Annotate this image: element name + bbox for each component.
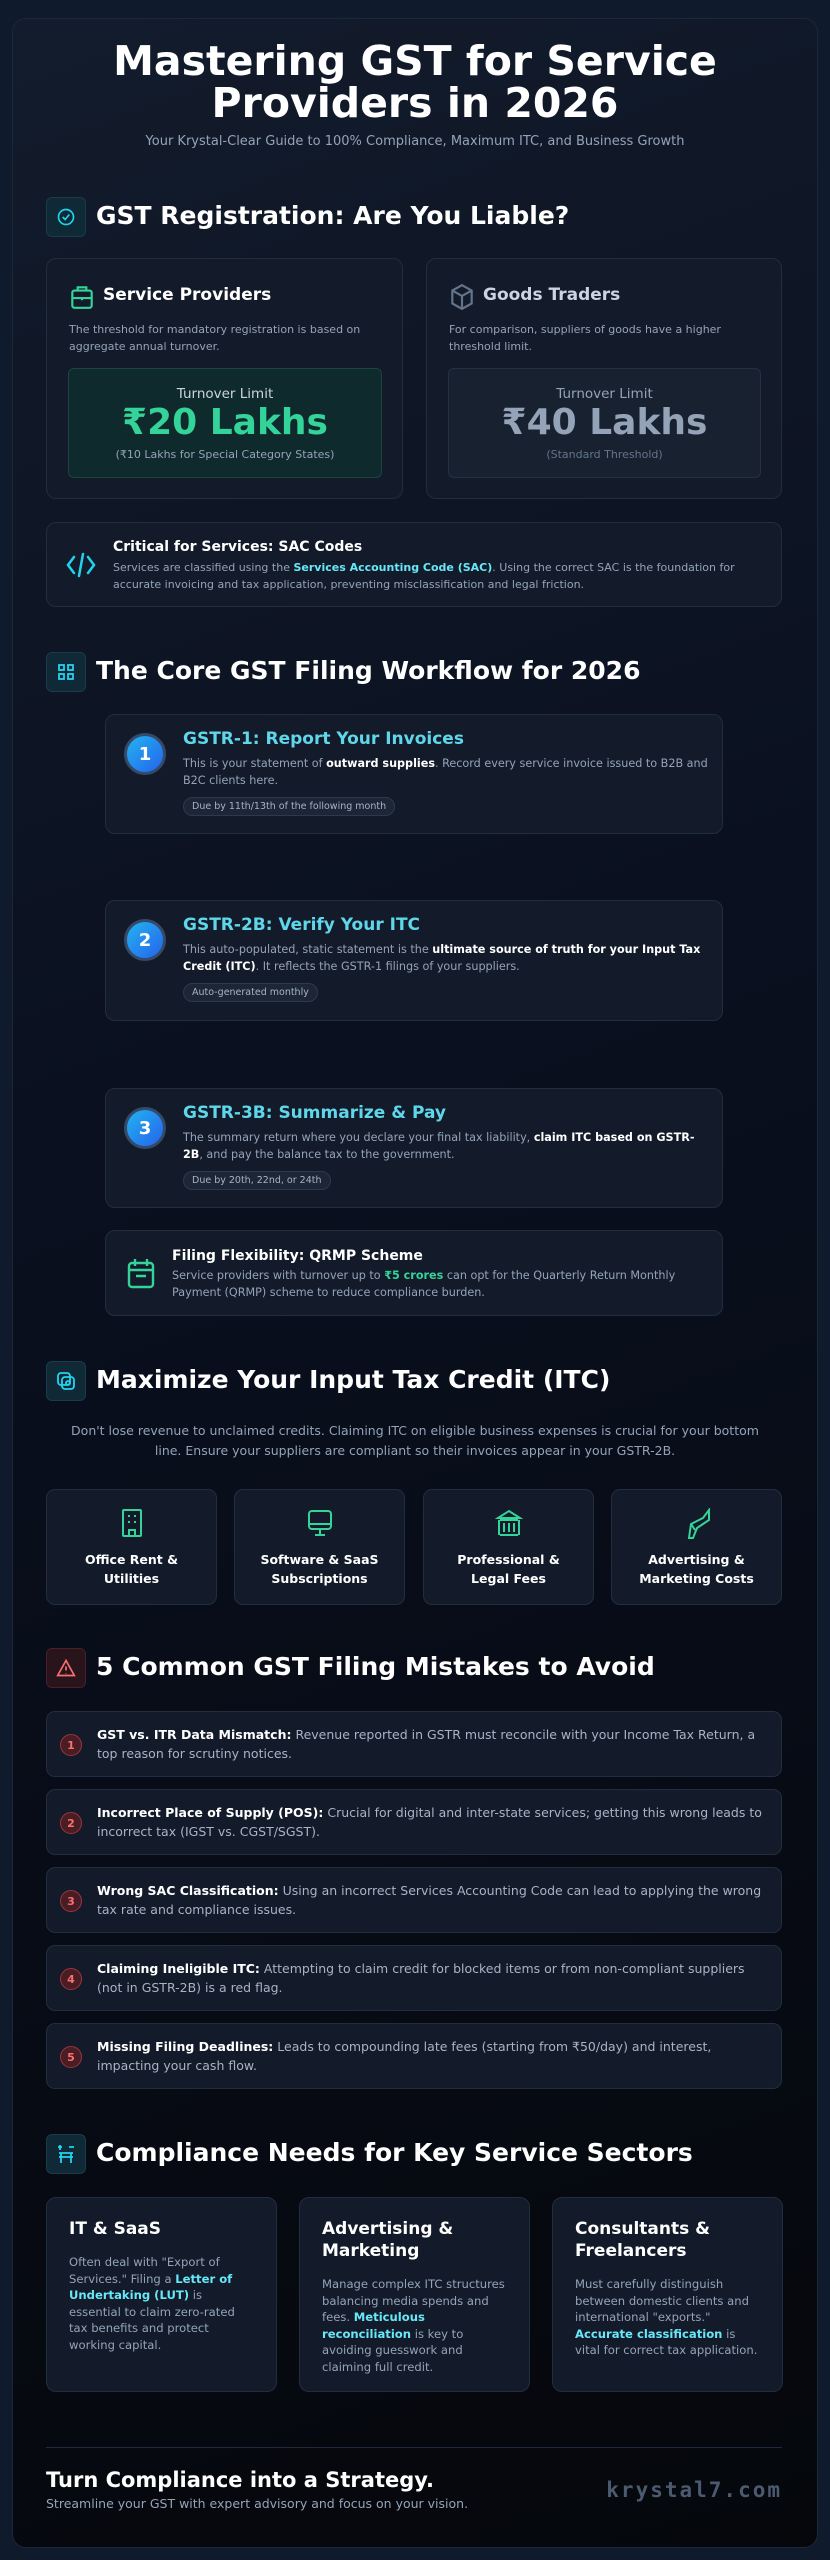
heading: sectors: Compliance Needs for Key Service Sectors [96,2138,693,2167]
mistake 3: 3 [67,1894,75,1908]
mistake 4: Claiming Ineligible ITC: Attempting to claim credit for blocked items or from non-compliant suppliers (not in GSTR-2B) is a red flag. [97,1961,745,1995]
ITC card: advertising [611,1489,782,1605]
limit box: ₹20 Lakhs [122,402,328,443]
sector: IT & SaaS: Often deal with "Export of Services." Filing a Letter of Undertaking (LUT) is essential to claim zero-rated tax benefits and protect working capital. [69,2255,235,2352]
step 2: This auto-populated, static statement is the ultimate source of truth for your Input Tax Credit (ITC). It reflects the GSTR-1 filings of your suppliers. [183,943,700,973]
icon: warning [46,1648,86,1688]
step 1: GSTR-1: Report Your Invoices [183,729,464,749]
limit box: Turnover Limit [177,386,273,402]
step 1 [105,714,723,834]
callout: SAC codes [46,522,782,607]
ITC card: professional: Legal Fees [471,1571,546,1586]
mistake 2 [46,1789,782,1855]
step 1: 1 [139,744,151,764]
heading: workflow: The Core GST Filing Workflow for 2026 [96,656,640,685]
mistake 5: 5 [67,2050,75,2064]
ITC card: office [46,1489,217,1605]
mistake 1: 1 [67,1738,75,1752]
icon: briefcase [71,286,93,309]
callout: QRMP: Service providers with turnover up to ₹5 crores can opt for the Quarterly Return Monthly Payment (QRMP) scheme to reduce compliance burden. [172,1269,675,1299]
mistake 4 [46,1945,782,2011]
footer [46,2468,782,2511]
sector: advertising: Advertising & Marketing [322,2219,453,2261]
ITC card: software [234,1489,405,1605]
callout: SAC codes: Critical for Services: SAC Codes [113,539,362,555]
icon: sectors [46,2134,86,2174]
icon: grid [46,652,86,692]
step 2: 2 [139,930,151,950]
mistake 5 [46,2023,782,2089]
step 3: The summary return where you declare your final tax liability, claim ITC based on GSTR-2B, and pay the balance tax to the government. [183,1131,694,1161]
sector: consultants: Must carefully distinguish between domestic clients and international "exports." Accurate classification is vital for correct tax application. [575,2277,757,2357]
text: For comparison, suppliers of goods have a higher threshold limit. [449,323,721,353]
heading: Service Providers [103,285,271,305]
title: Mastering GST for Service [113,37,717,85]
limit box: Turnover Limit [556,386,653,402]
callout: SAC codes: Services are classified using the Services Accounting Code (SAC). Using the correct SAC is the foundation for accurate invoicing and tax application, preventing misclassification and legal friction. [113,561,735,591]
title [113,37,717,127]
mistake 3 [46,1867,782,1933]
limit box: ₹40 Lakhs [502,402,707,443]
step 1: Due by 11th/13th of the following month [192,801,386,812]
callout: QRMP: Filing Flexibility: QRMP Scheme [172,1248,423,1264]
sector: IT & SaaS [46,2197,277,2392]
icon: coins [46,1361,86,1401]
icon: box [451,284,473,310]
limit box [68,368,382,478]
step 1: This is your statement of outward supplies. Record every service invoice issued to B2B and B2C clients here. [183,757,708,787]
sector: advertising: Manage complex ITC structures balancing media spends and fees. Meticulous reconciliation is key to avoiding guesswork and claiming full credit. [322,2277,505,2374]
sector: IT & SaaS: IT & SaaS [69,2219,161,2239]
ITC card: software: Software & SaaS [260,1552,379,1567]
ITC card: office: Office Rent & [85,1552,178,1567]
ITC card: advertising: Marketing Costs [639,1571,754,1586]
subtitle: Your Krystal-Clear Guide to 100% Compliance, Maximum ITC, and Business Growth [146,134,684,149]
callout: QRMP [105,1230,723,1316]
step 3: 3 [139,1118,151,1138]
ITC card: professional [423,1489,594,1605]
limit box: (₹10 Lakhs for Special Category States) [116,448,334,461]
sector: consultants [552,2197,783,2392]
mistake 2: Incorrect Place of Supply (POS): Crucial for digital and inter-state services; getting this wrong leads to incorrect tax (IGST vs. CGST/SGST). [97,1805,762,1839]
mistake 5: Missing Filing Deadlines: Leads to compounding late fees (starting from ₹50/day) and interest, impacting your cash flow. [97,2039,711,2073]
text: ITC intro: Don't lose revenue to unclaimed credits. Claiming ITC on eligible business expenses is crucial for your bottom line. Ensure your suppliers are compliant so their invoices appear in your GSTR-2B. [71,1423,759,1458]
sector: advertising [299,2197,530,2392]
step 3: Due by 20th, 22nd, or 24th [192,1175,322,1186]
mistake 1: GST vs. ITR Data Mismatch: Revenue reported in GSTR must reconcile with your Income Tax Return, a top reason for scrutiny notices. [97,1727,755,1761]
mistake 3: Wrong SAC Classification: Using an incorrect Services Accounting Code can lead to applying the wrong tax rate and compliance issues. [97,1883,761,1917]
heading: mistakes: 5 Common GST Filing Mistakes to Avoid [96,1652,655,1681]
mistake 4: 4 [67,1972,75,1986]
ITC card: professional: Professional & [457,1552,560,1567]
heading: registration: GST Registration: Are You Liable? [96,201,569,230]
limit box: (Standard Threshold) [546,448,663,461]
icon: calendar [128,1259,154,1288]
ITC card: office: Utilities [104,1571,159,1586]
step 2: Auto-generated monthly [192,987,309,998]
heading: ITC: Maximize Your Input Tax Credit (ITC) [96,1365,610,1394]
title: Providers in 2026 [212,79,618,127]
icon: code [66,552,96,578]
panel: goods traders [426,258,782,499]
step 3: GSTR-3B: Summarize & Pay [183,1103,446,1123]
step 2 [105,900,723,1021]
mistake 2: 2 [67,1816,75,1830]
footer: krystal7.com [606,2478,782,2502]
sector: consultants: Consultants & Freelancers [575,2219,710,2261]
icon: check circle [46,197,86,237]
heading: Goods Traders [483,285,620,305]
step 3 [105,1088,723,1208]
mistake 1 [46,1711,782,1777]
panel: service providers [46,258,403,499]
limit box [448,368,761,478]
footer: Turn Compliance into a Strategy. [46,2468,434,2492]
footer: Streamline your GST with expert advisory and focus on your vision. [46,2496,468,2511]
ITC card: advertising: Advertising & [648,1552,745,1567]
step 2: GSTR-2B: Verify Your ITC [183,915,420,935]
text: The threshold for mandatory registration is based on aggregate annual turnover. [69,323,360,353]
ITC card: software: Subscriptions [271,1571,368,1586]
